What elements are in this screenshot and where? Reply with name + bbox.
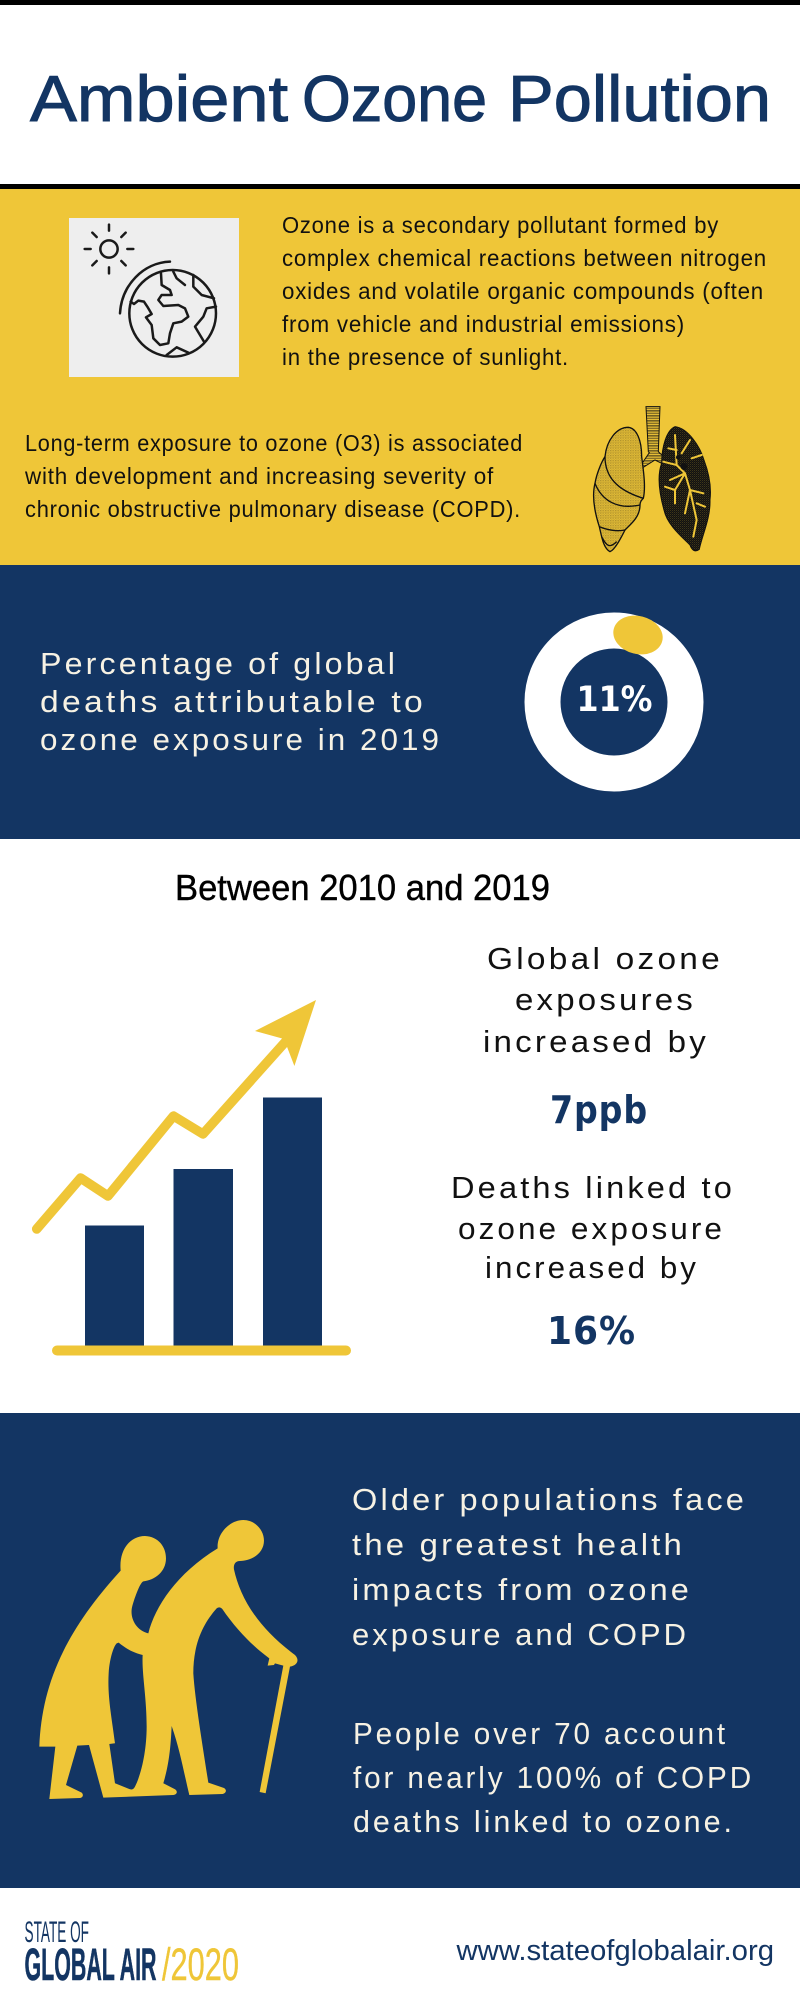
text: long-term exposure: with development and increasing severity of	[24, 463, 494, 489]
text: ozone definition: Ozone is a secondary pollutant formed by	[282, 212, 719, 238]
text: percentage description: Percentage of global	[40, 646, 398, 681]
text: older populations	[352, 1482, 747, 1652]
stat: deaths: ozone exposure	[458, 1211, 725, 1246]
stat: deaths: 16%	[547, 1309, 636, 1353]
logo: State of Global Air 2020: GLOBAL AIR	[24, 1939, 156, 1990]
stat: deaths	[451, 1170, 735, 1353]
text: ozone definition	[282, 212, 767, 370]
stat: ozone exposures: increased by	[483, 1024, 709, 1059]
stat: deaths: Deaths linked to	[451, 1170, 735, 1205]
stat: ozone exposures: 7ppb	[550, 1088, 648, 1132]
text: ozone definition: in the presence of sunlight.	[282, 344, 569, 370]
logo: State of Global Air 2020	[24, 1916, 239, 1990]
text: percentage description: deaths attributable to	[40, 684, 426, 719]
text: people over 70: deaths linked to ozone.	[353, 1804, 735, 1839]
title	[30, 62, 771, 135]
logo: State of Global Air 2020: /2020	[162, 1939, 239, 1990]
title: Pollution	[508, 62, 771, 135]
panel: older populations	[0, 1413, 800, 1888]
title: Ozone	[302, 62, 487, 135]
text: ozone definition: from vehicle and industrial emissions)	[282, 311, 685, 337]
text: percentage description: ozone exposure in 2019	[40, 722, 442, 757]
text: ozone definition: oxides and volatile organic compounds (often	[282, 278, 764, 304]
title: Ambient	[30, 62, 288, 135]
heading: between 2010 and 2019: Between 2010 and 2019	[175, 867, 550, 908]
logo: State of Global Air 2020: STATE OF	[24, 1916, 89, 1949]
header rule	[0, 184, 800, 189]
text: long-term exposure: Long-term exposure to ozone (O3) is associated	[25, 430, 523, 456]
panel: intro	[0, 189, 800, 565]
text: long-term exposure	[24, 430, 523, 522]
stat: ozone exposures: Global ozone	[487, 941, 723, 976]
bar chart with rising arrow	[37, 1000, 351, 1356]
arrow: upward trend	[37, 1000, 316, 1229]
stat: ozone exposures	[483, 941, 723, 1132]
text: older populations: the greatest health	[352, 1527, 685, 1562]
panel: global deaths percentage	[0, 565, 800, 839]
top bar	[0, 0, 800, 5]
icon: elderly couple with cane	[39, 1520, 297, 1799]
donut chart: 11%: 11%	[576, 680, 652, 720]
icon: sun and globe	[69, 218, 239, 377]
website url: www.stateofglobalair.org	[455, 1935, 774, 1967]
text: older populations: exposure and COPD	[352, 1617, 689, 1652]
text: people over 70	[353, 1716, 754, 1839]
stat: deaths: increased by	[485, 1250, 699, 1285]
text: older populations: impacts from ozone	[352, 1572, 692, 1607]
stat: ozone exposures: exposures	[515, 982, 696, 1017]
text: ozone definition: complex chemical reactions between nitrogen	[282, 245, 767, 271]
text: percentage description	[40, 646, 442, 757]
text: people over 70: for nearly 100% of COPD	[353, 1760, 754, 1795]
text: exposure stats	[451, 941, 735, 1353]
text: older populations: Older populations face	[352, 1482, 747, 1517]
donut chart: 11%	[542, 611, 686, 774]
text: people over 70: People over 70 account	[353, 1716, 728, 1751]
text: long-term exposure: chronic obstructive pulmonary disease (COPD).	[25, 496, 521, 522]
icon: lungs	[594, 407, 710, 552]
